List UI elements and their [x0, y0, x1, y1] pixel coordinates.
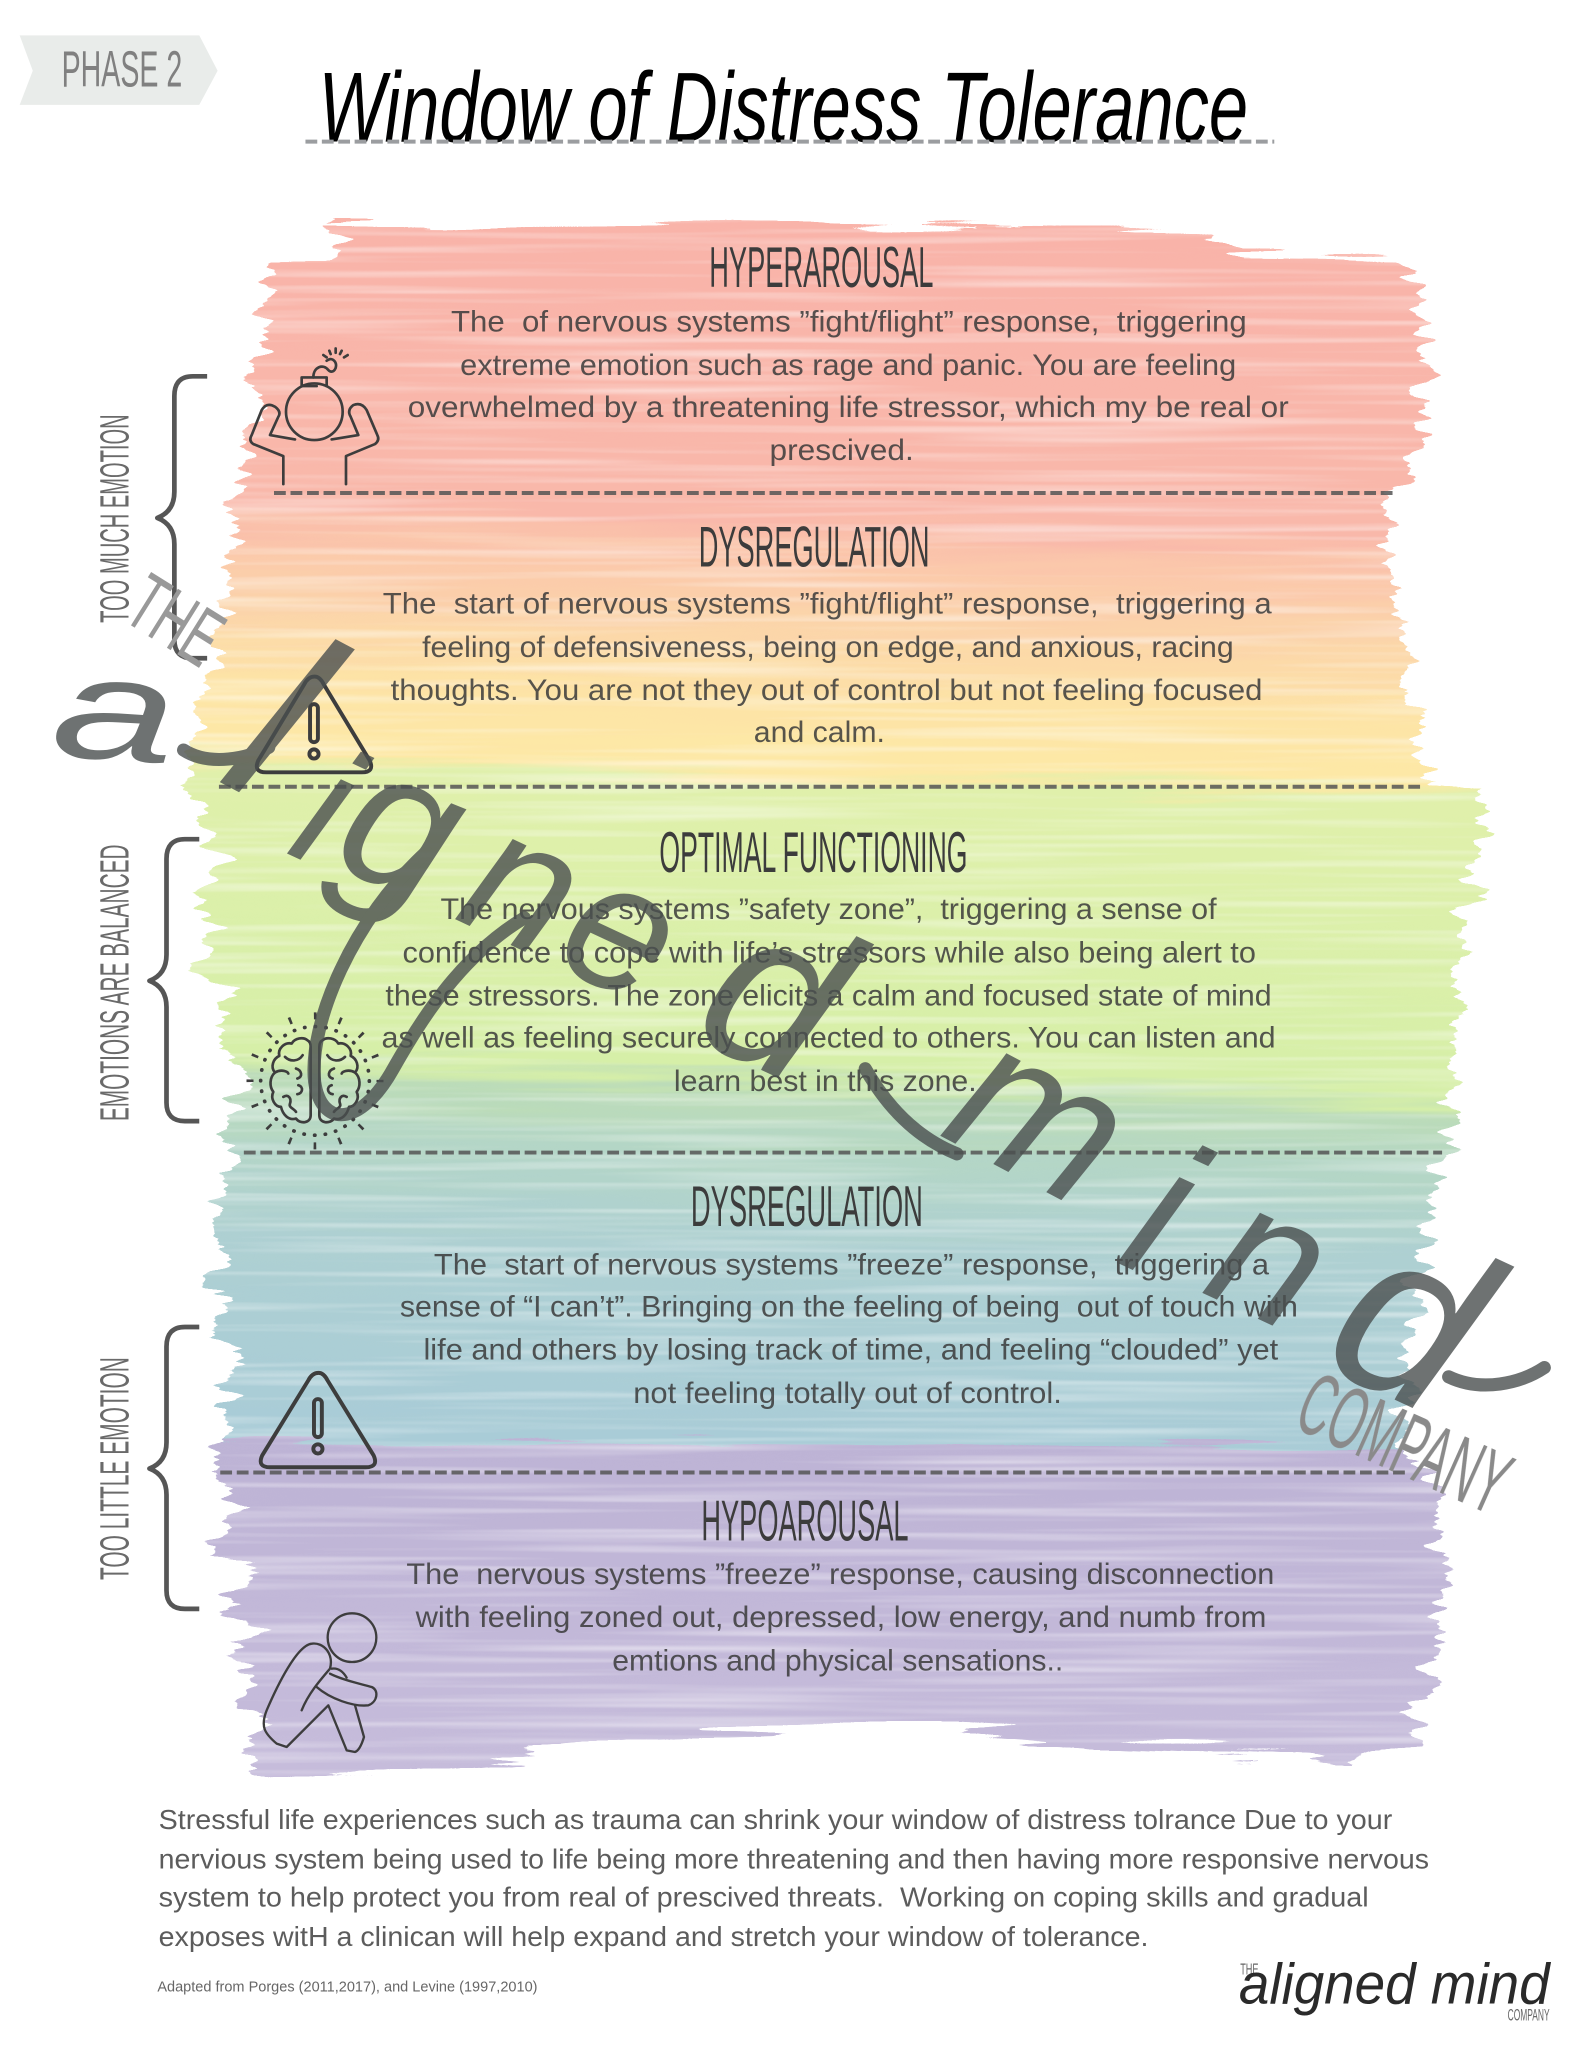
panel: lower dysregulation: DYSREGULATION [691, 1175, 923, 1239]
panel: hyperarousal: HYPERAROUSAL [709, 236, 933, 300]
text block: lower dysregulation description: The start of nervous systems ”freeze” response, triggering a [434, 1249, 1270, 1282]
watermark word: aligned mind: g [312, 700, 496, 945]
text block: upper dysregulation description: and calm. [754, 716, 885, 749]
phase tag [20, 35, 218, 105]
watermark word: aligned mind: n [436, 767, 615, 996]
panel: optimal functioning: OPTIMAL FUNCTIONING [659, 821, 968, 885]
icon: radiant brain [250, 1016, 380, 1146]
watermark word: aligned mind: l [191, 581, 376, 856]
text block: hypoarousal description: emtions and physical sensations.. [612, 1644, 1063, 1678]
side label: emotions are balanced: EMOTIONS ARE BALANCED [91, 844, 137, 1121]
text block: hypoarousal description [406, 1558, 1274, 1678]
text block: optimal functioning description: these stressors. The zone elicits a calm and focused state of mind [385, 980, 1272, 1013]
panel: hypoarousal [264, 1490, 1274, 1752]
logo: the aligned mind company: THE [1240, 1962, 1259, 1979]
watermark word: aligned mind: i [269, 714, 387, 904]
text block: hypoarousal description: The nervous systems ”freeze” response, causing disconnection [406, 1558, 1274, 1591]
watermark word: aligned mind: i [1097, 1100, 1234, 1320]
footer paragraph [159, 1803, 1429, 1952]
icon: curled up person [264, 1613, 376, 1752]
watermark word: aligned mind [48, 581, 1544, 1468]
side label: too little emotion: TOO LITTLE EMOTION [91, 1357, 137, 1580]
text block: hyperarousal description: extreme emotion such as rage and panic. You are feeling [460, 349, 1236, 382]
panel: optimal functioning [250, 821, 1276, 1146]
text block: optimal functioning description: The nervous systems ”safety zone”, triggering a sense of [440, 893, 1217, 926]
text block: lower dysregulation description: life and others by losing track of time, and feeling “clouded” yet [423, 1334, 1278, 1367]
icon: warning triangle [261, 1373, 375, 1467]
divider: optimal / dysregulation [244, 1151, 1442, 1154]
text block: hyperarousal description: overwhelmed by a threatening life stressor, which my be real or [408, 391, 1289, 424]
text block: optimal functioning description: learn best in this zone. [674, 1065, 977, 1098]
text block: lower dysregulation description: not feeling totally out of control. [633, 1377, 1062, 1410]
divider: dysregulation / hypoarousal [220, 1471, 1405, 1474]
watermark flourishes [184, 747, 1544, 1385]
text block: lower dysregulation description [400, 1249, 1298, 1410]
text block: optimal functioning description: confidence to cope with life’s stressors while also being alert to [402, 936, 1256, 969]
divider: dysregulation / optimal [219, 785, 1422, 788]
logo: the aligned mind company: aligned mind [1239, 1953, 1551, 2017]
divider: hyperarousal / dysregulation [274, 492, 1396, 495]
watermark: the aligned mind company [48, 557, 1544, 1534]
side label: emotions are balanced [91, 839, 199, 1121]
footer paragraph: exposes witH a clinican will help expand and stretch your window of tolerance. [159, 1920, 1148, 1952]
footer paragraph: Stressful life experiences such as trauma can shrink your window of distress tolrance Due to your [159, 1803, 1392, 1835]
footer paragraph: system to help protect you from real of prescived threats. Working on coping skills and gradual [159, 1881, 1369, 1913]
text block: upper dysregulation description [383, 588, 1272, 749]
watermark word: aligned mind: n [1183, 1141, 1362, 1370]
icon: person holding bomb [250, 348, 378, 484]
watermark word: aligned mind: d [1296, 1171, 1533, 1468]
panel: upper dysregulation: DYSREGULATION [699, 515, 929, 579]
text block: upper dysregulation description: The start of nervous systems ”fight/flight” response, triggering a [383, 588, 1272, 621]
watermark word: aligned mind: e [534, 813, 713, 1042]
text block: hyperarousal description: The of nervous systems ”fight/flight” response, triggering [451, 306, 1247, 339]
watermark word: the: THE [111, 557, 239, 684]
panel: hypoarousal: HYPOAROUSAL [701, 1490, 909, 1554]
text block: upper dysregulation description: thoughts. You are not they out of control but not feeling focused [391, 674, 1262, 707]
watermark word: aligned mind: a [48, 625, 182, 795]
text block: lower dysregulation description: sense of “I can’t”. Bringing on the feeling of being out of touch with [400, 1290, 1298, 1323]
watercolor brush background [131, 197, 1521, 1800]
icon: warning triangle [257, 677, 371, 772]
footer paragraph: nervious system being used to life being more threatening and then having more responsive nervous [159, 1842, 1429, 1874]
text block: upper dysregulation description: feeling of defensiveness, being on edge, and anxious, racing [422, 631, 1234, 664]
text block: hyperarousal description [408, 306, 1289, 467]
text block: hyperarousal description: prescived. [770, 434, 914, 467]
panel: lower dysregulation [261, 1175, 1298, 1467]
side label: too much emotion: TOO MUCH EMOTION [91, 414, 137, 623]
panel: hyperarousal [250, 236, 1289, 484]
text block: optimal functioning description: as well as feeling securely connected to others. You can listen and [381, 1022, 1276, 1055]
watermark word: aligned mind: m [918, 977, 1166, 1248]
text block: optimal functioning description [381, 893, 1276, 1098]
attribution: Adapted from Porges (2011,2017), and Levine (1997,2010) [157, 1979, 538, 1996]
side label: too little emotion [91, 1327, 199, 1609]
phase tag: PHASE 2 [62, 41, 182, 98]
panel: upper dysregulation [257, 515, 1272, 772]
side label: too much emotion [91, 376, 207, 658]
watermark word: aligned mind: d [668, 854, 891, 1134]
text block: hypoarousal description: with feeling zoned out, depressed, low energy, and numb from [415, 1601, 1266, 1634]
